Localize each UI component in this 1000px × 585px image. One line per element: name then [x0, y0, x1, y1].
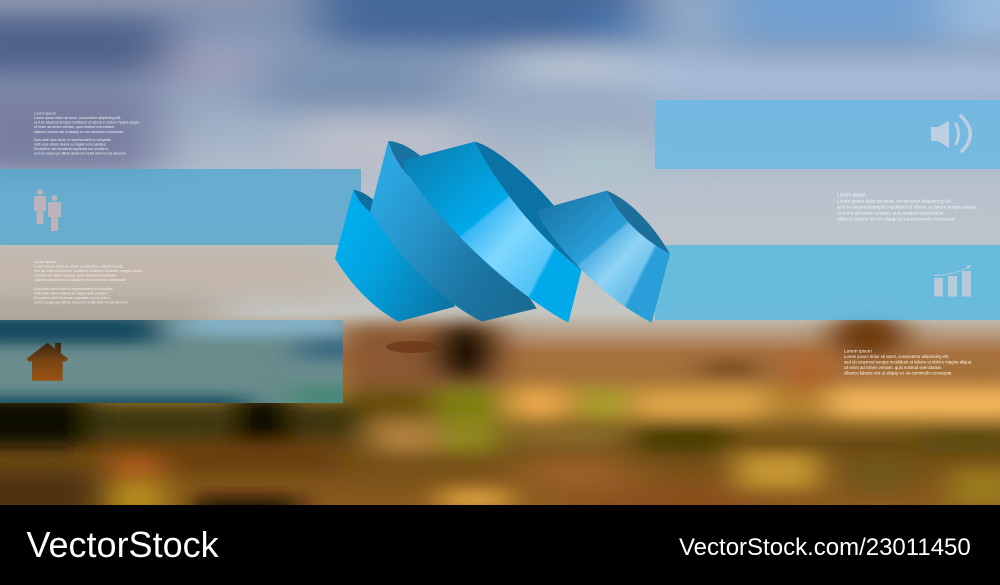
text block: upper left: sunt in culpa qui officia deserunt mollit anim id est laborum.: [34, 152, 127, 156]
footer bar: [0, 505, 1000, 585]
text block: upper right: Lorem ipsum: [837, 192, 866, 198]
footer logo: VectorStock: [26, 524, 220, 565]
spiral diagram: [335, 137, 673, 327]
text block: lower left: Excepteur sint occaecat cupidatat non proident,: [34, 296, 111, 300]
text block: upper left: sed do eiusmod tempor incididunt ut labore et dolore magna aliqua.: [34, 121, 140, 125]
text block: lower left: velit esse cillum dolore eu fugiat nulla pariatur.: [34, 292, 108, 296]
text block: upper left: ullamco laboris nisi ut aliquip ex ea commodo consequat.: [34, 130, 124, 134]
text block: lower right: Lorem ipsum dolor sit amet, consectetur adipisicing elit,: [844, 354, 950, 359]
text block: lower left: Ut enim ad minim veniam, quis nostrud exercitation: [34, 274, 117, 278]
shadow under spiral: [386, 341, 438, 353]
spiral piece 4: [538, 190, 670, 322]
text block: upper right: Ut enim ad minim veniam, quis nostrud exercitation: [837, 210, 944, 216]
text block: lower right: ullamco laboris nisi ut aliquip ex ea commodo consequat.: [844, 370, 953, 376]
text block: lower left: sunt in culpa qui officia deserunt mollit anim id est laborum.: [34, 300, 129, 304]
text block: lower left: sed do eiusmod tempor incididunt ut labore et dolore magna aliqua.: [34, 269, 143, 273]
text block: upper right: [837, 192, 977, 222]
spiral piece 3: [400, 137, 587, 327]
footer url: VectorStock.com/23011450: [679, 534, 971, 561]
text block: lower left: Lorem ipsum: [34, 259, 56, 264]
icon: house: [27, 343, 68, 381]
text block: upper left: velit esse cillum dolore eu fugiat nulla pariatur.: [34, 142, 107, 146]
spiral piece 1: [335, 190, 455, 322]
band: right top: [655, 100, 1000, 169]
text block: lower left: Duis aute irure dolor in reprehenderit in voluptate: [34, 287, 113, 291]
text block: upper left: Ut enim ad minim veniam, quis nostrud exercitation: [34, 125, 114, 129]
text block: upper left: Duis aute irure dolor in reprehenderit in voluptate: [34, 138, 111, 142]
text block: lower right: sed do eiusmod tempor incididunt ut labore et dolore magna aliqua.: [844, 360, 972, 364]
band: right bottom: [655, 245, 1000, 320]
text block: upper left: [34, 112, 140, 156]
text block: upper left: Lorem ipsum dolor sit amet, consectetur adipisicing elit,: [34, 116, 121, 120]
text block: upper right: sed do eiusmod tempor incididunt ut labore et dolore magna aliqua.: [837, 204, 977, 210]
text block: upper right: Lorem ipsum dolor sit amet, consectetur adipisicing elit,: [837, 198, 952, 204]
icon: growth chart: [934, 265, 971, 296]
text block: lower left: ullamco laboris nisi ut aliquip ex ea commodo consequat.: [34, 278, 126, 282]
text block: lower left: Lorem ipsum dolor sit amet, consectetur adipisicing elit,: [34, 264, 123, 268]
icon: people: [34, 189, 61, 231]
icon: speaker: [931, 116, 970, 151]
text block: upper left: Excepteur sint occaecat cupidatat non proident,: [34, 147, 109, 151]
text block: upper right: ullamco laboris nisi ut aliquip ex ea commodo consequat.: [837, 216, 956, 222]
text block: lower right: Lorem ipsum: [844, 348, 872, 354]
text block: lower left: [34, 259, 143, 304]
band: left top: [0, 169, 361, 245]
text block: lower right: Ut enim ad minim veniam, quis nostrud exercitation: [844, 365, 942, 370]
text block: upper left: Lorem ipsum: [34, 112, 56, 116]
band: left bottom: [0, 320, 343, 403]
spiral piece 2: [370, 141, 537, 322]
text block: lower right: [844, 348, 972, 376]
